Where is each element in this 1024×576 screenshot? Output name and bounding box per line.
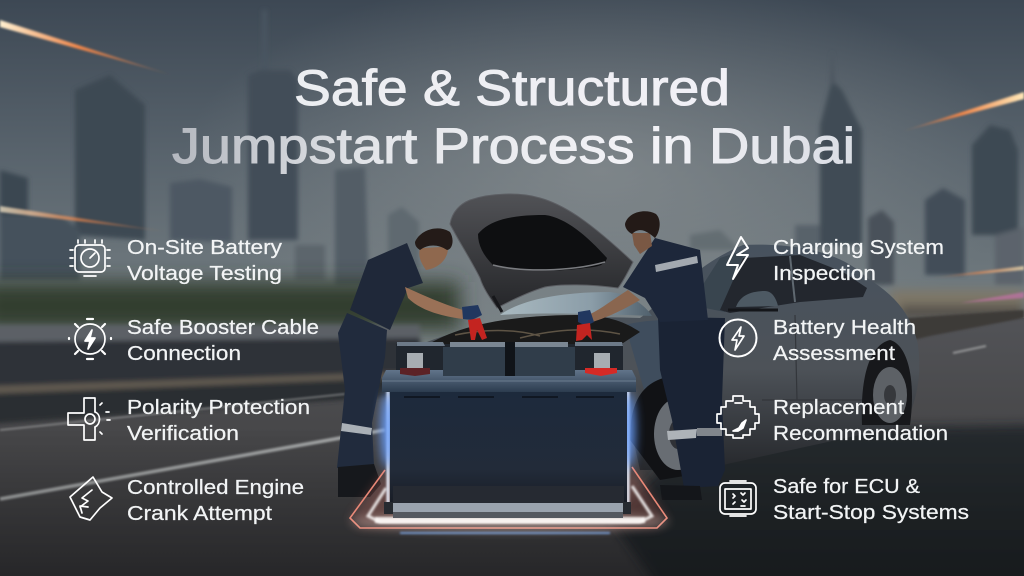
front windshield: [500, 292, 652, 316]
head and hair: [632, 233, 652, 254]
windshield behind: [690, 250, 745, 312]
reflective strip on leg: [341, 423, 372, 435]
icon: ecu unit: [720, 481, 756, 516]
label: Safe Booster Cable: [127, 316, 319, 339]
positive terminal: [594, 353, 610, 368]
label: On-Site Battery: [127, 236, 283, 259]
road shadow under car: [610, 425, 1024, 576]
front wheel: [630, 375, 720, 480]
reflective strip on leg: [667, 429, 697, 440]
mechanic left: [337, 228, 487, 497]
feature: controlled engine crank attempt: [70, 476, 304, 525]
title: [172, 60, 855, 174]
icon: bolt in sun gear: [69, 319, 111, 359]
arm: [405, 287, 463, 319]
title: Jumpstart Process in Dubai: [172, 118, 855, 174]
feature: replacement recommendation: [717, 396, 948, 445]
feature: battery health assessment: [720, 316, 916, 365]
guardrail left: [0, 325, 420, 424]
icon: lightning bolt: [727, 237, 748, 279]
guardrail right: [905, 310, 1024, 342]
trousers: [658, 317, 725, 488]
glow base outline: [350, 465, 670, 533]
feature: safe booster cable connection: [69, 316, 319, 365]
wing mirror: [736, 291, 778, 307]
label: Verification: [127, 422, 239, 445]
icon: voltage gauge: [70, 240, 110, 276]
label: Assessment: [773, 342, 895, 365]
label: Charging System: [773, 236, 944, 259]
label: Controlled Engine: [127, 476, 304, 499]
label: Crank Attempt: [127, 502, 272, 525]
trousers: [337, 313, 387, 468]
label: Polarity Protection: [127, 396, 310, 419]
icon: crank rotation: [70, 477, 112, 520]
car body: [420, 245, 919, 470]
road lane markings: [0, 346, 986, 499]
label: Connection: [127, 342, 241, 365]
boots: [338, 464, 381, 497]
car: [420, 245, 919, 480]
feature: on-site battery voltage testing: [70, 236, 283, 285]
icon: polarity cross: [68, 398, 110, 440]
rear wheel: [862, 340, 912, 425]
arm: [588, 290, 640, 322]
open car hood: [450, 194, 633, 312]
light streaks: [0, 20, 1024, 303]
side glow: [388, 385, 628, 505]
feature: safe for ecu and start-stop systems: [720, 475, 969, 524]
mechanic right: [576, 211, 725, 500]
roadside greenery: [0, 282, 460, 330]
feature: polarity protection verification: [68, 396, 310, 445]
negative terminal: [407, 353, 423, 368]
boots: [660, 485, 702, 500]
label: Replacement: [773, 396, 904, 419]
road surface: [0, 318, 1024, 576]
label: Voltage Testing: [127, 262, 282, 285]
icon: chip with wrench: [717, 396, 759, 438]
glove: [578, 310, 594, 326]
red clamp: [468, 318, 487, 340]
top covers: [396, 344, 623, 370]
battery lid: [382, 370, 636, 392]
label: Recommendation: [773, 422, 948, 445]
label: Start-Stop Systems: [773, 501, 969, 524]
feature: charging system inspection: [727, 236, 944, 285]
head and hair: [419, 247, 448, 270]
engine bay: [427, 315, 640, 345]
red clamp: [576, 323, 592, 341]
title: Safe & Structured: [294, 60, 730, 116]
label: Safe for ECU &: [773, 475, 920, 498]
battery base: [393, 503, 623, 518]
glove: [462, 305, 482, 320]
shirt: [350, 243, 423, 330]
battery with glow: [350, 342, 670, 533]
reflective strip on shirt: [655, 256, 698, 272]
battery body: [390, 392, 627, 503]
icon: bolt in circle: [720, 320, 756, 356]
label: Battery Health: [773, 316, 916, 339]
side windows: [720, 255, 867, 313]
label: Inspection: [773, 262, 876, 285]
shirt: [623, 238, 708, 322]
